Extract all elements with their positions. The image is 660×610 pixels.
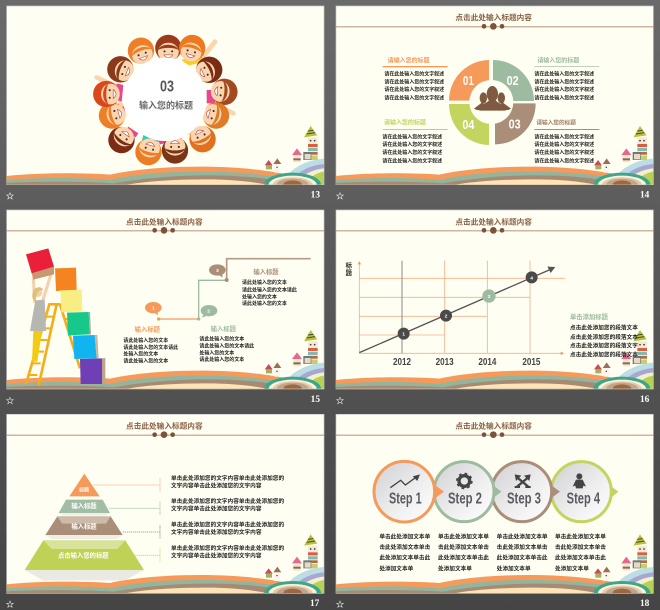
block: top left: 请输入您的标题: [388, 57, 430, 65]
block: top left: 请在此处输入您的文字叙述: [384, 70, 444, 77]
text row 3: 文字内容单击此处添加您的文字内容: [171, 528, 262, 536]
step 2 text: [438, 532, 489, 572]
text row 1: 文字内容单击此处添加您的文字内容: [171, 481, 262, 489]
text block 2: 处输入您的文本: [199, 350, 234, 357]
point 3: [482, 289, 496, 303]
step 1 text: 处添加文本单: [379, 564, 414, 572]
slide 16 title: 点击此处输入标题内容: [455, 216, 532, 226]
block: top left: 请在此处输入您的文字叙述: [384, 78, 444, 85]
axis years: [393, 357, 541, 368]
quadrant 01: [449, 60, 489, 101]
slide 14 landscape: [336, 126, 653, 185]
block: top right: 请在此处输入您的文字叙述: [534, 95, 594, 102]
slide 17 header rule: [7, 431, 324, 438]
text row 4: [171, 544, 284, 560]
step 2: Step 2: [448, 491, 482, 508]
step 4 text: 单击此处添加文本单: [555, 532, 606, 540]
point 1: 1: [402, 332, 405, 338]
text block 3: 请此处输入您的文本: [242, 300, 287, 307]
text row 2: 文字内容单击此处添加您的文字内容: [171, 505, 262, 513]
text row 4: 单击此处添加您的文字内容单击此处添加您的: [171, 544, 284, 552]
quadrant 01: 01: [463, 73, 474, 88]
step 3 text: [497, 532, 548, 572]
icon: gear: [457, 474, 472, 488]
axis years: 2014: [478, 357, 497, 368]
quadrant 02: 02: [507, 73, 519, 88]
step 1: [374, 461, 444, 522]
text row 3: 单击此处添加您的文字内容单击此处添加您的: [171, 521, 284, 529]
slide 18 header rule: [336, 431, 653, 438]
note text: 点击此处添加您的段落文本: [570, 333, 638, 341]
slide 15 frame: [7, 210, 324, 389]
block: bottom left: 请在此处输入您的文字叙述: [382, 133, 442, 140]
pyramid tier 1: 标题: [79, 487, 89, 494]
quadrant 02: [493, 60, 534, 101]
block: bottom right: [534, 118, 599, 164]
icon: crossing arrows: [515, 474, 531, 488]
page number: 16: [640, 395, 650, 405]
block: top right: 请输入您的标题: [537, 57, 579, 65]
children ring: [93, 32, 239, 168]
point 4: [526, 271, 538, 283]
text block 2: 请此处输入您的文本: [199, 335, 244, 342]
slide 18 frame: [336, 414, 653, 593]
step 4 text: 击此处添加文本单击: [555, 543, 606, 551]
icon: people: [474, 86, 511, 111]
quadrant numbers 03 04: 03: [509, 116, 521, 131]
block: top left: 请在此处输入您的文字叙述: [384, 95, 444, 102]
block: bottom left: 请在此处输入您的文字叙述: [382, 157, 442, 164]
slide 14 header rule: [336, 23, 653, 30]
quadrant 03: [495, 103, 536, 144]
quadrant numbers 03 04: [462, 116, 521, 132]
step 2 text: 单击此处添加文本单: [438, 532, 489, 540]
footer star: [7, 193, 13, 199]
slide 16 frame: [336, 210, 653, 389]
point 2: 2: [445, 314, 448, 320]
step 1 text: 此处添加文本单击此: [379, 554, 431, 562]
block: bottom right: 请在此处输入您的文字叙述: [534, 141, 594, 148]
block: bottom right: 请在此处输入您的文字叙述: [534, 133, 594, 140]
step 3 text: 处添加文本单: [497, 564, 531, 572]
pyramid tier 2: 输入标题: [71, 501, 97, 510]
axis title: [346, 260, 353, 277]
bubble 3: [209, 264, 226, 278]
text block 1: 请此处输入您的文本请此: [123, 344, 178, 351]
footer star: [7, 601, 13, 607]
quadrant numbers 03 04: 04: [462, 117, 475, 132]
step 3 text: 此处添加文本单击此: [497, 554, 548, 562]
slide 14: four quadrant circle: [336, 6, 653, 201]
text block 3: [242, 267, 297, 307]
text block 3: 请此处输入您的文本请此: [242, 286, 297, 293]
step 1 text: [379, 532, 431, 572]
step 4 text: 处添加文本单: [555, 564, 589, 572]
text block 3: 输入标题: [253, 267, 279, 276]
slide 14 frame: [336, 6, 653, 185]
step 3 text: 击此处添加文本单击: [497, 543, 548, 551]
note text: 点击此处添加您的段落文本: [570, 324, 638, 332]
axis title: 题: [346, 269, 353, 277]
step 4 text: 此处添加文本单击此: [555, 554, 606, 562]
page number: 17: [310, 599, 320, 609]
slide 16 landscape: [336, 330, 653, 389]
dashed leader lines: [93, 478, 160, 562]
point 1: [398, 328, 410, 340]
block: top left: 请在此处输入您的文字叙述: [384, 86, 444, 93]
text row 4: 文字内容单击此处添加您的文字内容: [171, 552, 262, 560]
point 3: 3: [488, 294, 491, 300]
slide 17 frame: [7, 414, 324, 593]
step 4: [551, 462, 618, 522]
block: bottom right: 请在此处输入您的文字叙述: [534, 157, 594, 164]
step 3: [492, 462, 560, 522]
block: top right: 请在此处输入您的文字叙述: [534, 86, 594, 93]
section title: 输入您的标题: [139, 100, 193, 111]
icon: person: [573, 473, 586, 488]
text block 1: 请此处输入您的文本: [123, 337, 168, 344]
block: bottom left: [382, 118, 448, 164]
text block 2: [199, 324, 254, 363]
footer star: [337, 193, 343, 199]
axis years: 2015: [522, 357, 541, 368]
page number: 13: [311, 191, 320, 201]
note text: 点击此处添加您的段落文字: [570, 341, 638, 349]
icon: trend arrow: [390, 476, 417, 488]
slide 17 title: 点击此处输入标题内容: [126, 420, 203, 430]
block: bottom right: 请输入您的标题: [536, 118, 576, 126]
note text: 单击添加标题: [570, 312, 609, 321]
step 1 text: 单击此处添加文本单: [379, 532, 431, 540]
block: bottom left: 请在此处输入您的文字叙述: [382, 141, 442, 148]
bubble 3: 3: [216, 268, 219, 274]
step 4 text: [555, 532, 606, 572]
footer star: [337, 601, 343, 607]
block: top right: [534, 57, 599, 102]
step 1 text: 击此处添加文本单击: [379, 543, 431, 551]
slide 16: trend chart: [336, 210, 653, 405]
slide 18: four steps: [336, 414, 653, 609]
slide 15 title: 点击此处输入标题内容: [126, 216, 203, 226]
quadrant 04: [449, 104, 489, 145]
text block 3: 处输入您的文本: [242, 293, 277, 300]
slide 15: stacked blocks steps: [7, 210, 324, 405]
text block 2: 请此处输入您的文本请此: [199, 343, 254, 350]
step 2: [434, 462, 501, 522]
text block 2: 请此处输入您的文本: [199, 356, 244, 363]
slide 17 landscape: [7, 534, 324, 593]
text row 2: 单击此处添加您的文字内容单击此处添加您的: [171, 497, 284, 505]
point 2: [440, 310, 452, 322]
text block 1: 处输入您的文本: [123, 351, 158, 358]
section number: 03: [160, 78, 174, 95]
note text: 点击此处添加您的段落文本: [570, 351, 638, 359]
axis title: 标: [346, 260, 353, 269]
slide 13: section cover: [7, 6, 324, 201]
bubble 1: 1: [152, 306, 155, 312]
slide 15 landscape: [7, 330, 324, 389]
text block 3: 请此处输入您的文本: [242, 279, 287, 286]
step 3 text: 单击此处添加文本单: [497, 532, 548, 540]
point 4: 4: [530, 275, 533, 281]
slide 13 landscape: [7, 126, 324, 185]
text row 1: 单击此处添加您的文字内容单击此处添加您的: [171, 474, 284, 482]
text row 2: [171, 497, 284, 513]
step connector line: [157, 259, 311, 321]
bubble 2: 2: [207, 309, 210, 315]
block: top left: [383, 57, 448, 102]
pyramid: [25, 474, 144, 580]
page number: 14: [640, 191, 650, 201]
page number: 18: [640, 599, 650, 609]
block: bottom left: 请在此处输入您的文字叙述: [382, 149, 442, 156]
footer star: [7, 397, 13, 404]
woman on ladder with blocks: [26, 248, 105, 386]
step 2 text: 击此处添加文本单击: [438, 543, 489, 551]
text row 1: [171, 474, 284, 489]
block: bottom left: 请输入您的标题: [384, 118, 426, 126]
block: top right: 请在此处输入您的文字叙述: [534, 78, 594, 85]
center circle: [469, 80, 513, 124]
axis years: 2012: [393, 357, 411, 368]
bubble 1: [145, 302, 162, 316]
step 2 text: 此处添加文本单击此: [438, 554, 489, 562]
slide 13 frame: [7, 6, 324, 185]
step 2 text: 处添加文本单: [438, 564, 472, 572]
block: bottom right: 请在此处输入您的文字叙述: [534, 149, 594, 156]
step 4: Step 4: [567, 491, 600, 508]
pyramid tier 4: 点击输入您的标题: [58, 551, 109, 560]
slide 15 header rule: [7, 227, 324, 234]
slide 18 title: 点击此处输入标题内容: [455, 420, 532, 430]
slide 17: pyramid: [7, 414, 324, 609]
pyramid tier 3: 输入标题: [71, 521, 97, 530]
text row 3: [171, 521, 284, 536]
step 3: Step 3: [507, 491, 541, 508]
text block 1: [123, 325, 178, 364]
slide 18 landscape: [336, 534, 653, 593]
text block 1: 输入标题: [135, 325, 161, 334]
step 1: Step 1: [389, 491, 422, 508]
text block 1: 请此处输入您的文本: [123, 357, 168, 364]
bubble 2: [201, 305, 217, 318]
line chart: [358, 261, 565, 368]
note text: [570, 312, 638, 359]
block: top right: 请在此处输入您的文字叙述: [534, 70, 594, 77]
footer star: [337, 397, 343, 404]
axis years: 2013: [436, 357, 454, 368]
slide 14 title: 点击此处输入标题内容: [455, 12, 532, 22]
slide 16 header rule: [336, 227, 653, 234]
text block 2: 输入标题: [211, 324, 237, 333]
page number: 15: [311, 395, 320, 405]
